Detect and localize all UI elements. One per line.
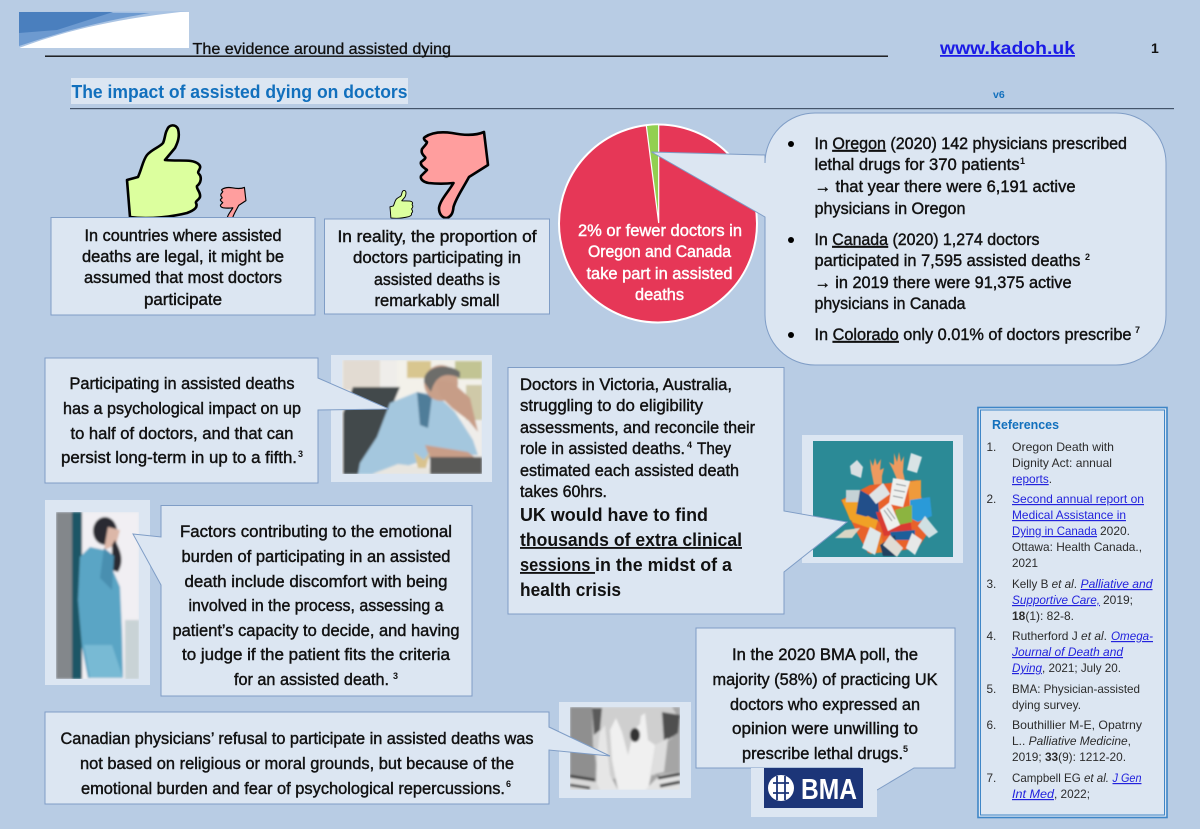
reference 4: Rutherford J et al. xyxy=(1012,629,1107,643)
reference 2 xyxy=(986,492,1144,570)
panel: BMA poll xyxy=(696,628,955,790)
reference 6: 2019; 33(9): 1212-20. xyxy=(1012,750,1126,764)
reference 2: 2020. xyxy=(1100,524,1130,538)
reference 7: J Gen xyxy=(1112,771,1142,785)
BMA logo xyxy=(751,768,877,817)
reference 5 xyxy=(986,682,1140,712)
panel: BMA poll: In the 2020 BMA poll, the xyxy=(732,646,918,664)
pie chart: 2% or fewer doctors in xyxy=(578,222,742,240)
bullet: Oregon: 1 xyxy=(1020,156,1025,166)
reference 1: 1. xyxy=(986,440,996,454)
bullet: Colorado: 7 xyxy=(1135,325,1140,335)
panel: psychological impact: has a psychological impact on up xyxy=(63,400,301,418)
header logo xyxy=(19,11,189,48)
panel: workload in Victoria: takes 60hrs. xyxy=(520,483,607,501)
bullet: Canada: → in 2019 there were 91,375 active xyxy=(814,274,1072,292)
panel: psychological impact: persist long-term in up to a fifth. xyxy=(61,449,297,467)
panel: Canadian physicians xyxy=(45,712,610,804)
panel: assumption xyxy=(51,218,315,315)
icon: small thumb down xyxy=(220,187,246,222)
panel: psychological impact: Participating in assisted deaths xyxy=(70,375,294,393)
header rule xyxy=(45,56,888,57)
panel: workload in Victoria: They xyxy=(697,440,732,458)
reference 2: 2021 xyxy=(1012,556,1038,570)
reference 2: Medical Assistance in xyxy=(1012,508,1126,522)
bullet: Canada xyxy=(788,231,1090,313)
reference 1: Oregon Death with xyxy=(1012,440,1114,454)
BMA logo: BMA xyxy=(801,774,857,806)
reference 3: Palliative and xyxy=(1080,577,1153,591)
key message: sessions xyxy=(520,554,595,575)
reference 1: reports. xyxy=(1012,472,1052,486)
reference 3 xyxy=(986,577,1153,623)
panel: BMA poll: 5 xyxy=(903,744,908,754)
pie chart xyxy=(559,124,757,322)
panel: assumption: In countries where assisted xyxy=(84,227,282,245)
panel: Canadian physicians: emotional burden and fear of psychological repercussions. xyxy=(81,780,505,798)
bullet: Canada: In Canada (2020) 1,274 doctors xyxy=(814,231,1040,249)
subtitle heading: The impact of assisted dying on doctors xyxy=(72,81,408,102)
bullet: Colorado: In Colorado only 0.01% of doctors prescribe xyxy=(814,326,1132,344)
panel: Canadian physicians: not based on religious or moral grounds, but because of the xyxy=(80,755,514,773)
reference 3: Kelly B et al. xyxy=(1012,577,1077,591)
reference 1: Dignity Act: annual xyxy=(1012,456,1112,470)
reference 2: 2. xyxy=(986,492,996,506)
panel: emotional burden: burden of participating in an assisted xyxy=(182,548,450,566)
bullet: Canada: 2 xyxy=(1085,252,1090,262)
panel: emotional burden: 3 xyxy=(393,671,398,681)
photo: distressed nurse xyxy=(45,500,150,685)
key message: in the midst of a xyxy=(595,554,733,575)
version label: v6 xyxy=(993,89,1005,101)
reference 7: Campbell EG et al. xyxy=(1012,771,1109,785)
header title: The evidence around assisted dying xyxy=(192,41,451,58)
pie chart: deaths xyxy=(635,286,684,304)
panel: assumption: assumed that most doctors xyxy=(84,269,282,287)
bullet: Canada: participated in 7,595 assisted deaths xyxy=(814,252,1080,270)
panel: reality xyxy=(324,219,550,314)
panel: references xyxy=(978,408,1167,818)
panel: statistics callout xyxy=(652,113,1166,365)
reference 6: Bouthillier M-E, Opatrny xyxy=(1012,718,1142,732)
panel: reality: In reality, the proportion of xyxy=(338,228,537,246)
reference 3: 2019; xyxy=(1103,593,1133,607)
reference 5: dying survey. xyxy=(1012,698,1081,712)
reference 2: Second annual report on xyxy=(1012,492,1144,506)
reference 4: , 2021; July 20. xyxy=(1042,661,1121,675)
reference 7: 7. xyxy=(986,771,996,785)
reference 4: Journal of Death and xyxy=(1011,645,1123,659)
references heading: References xyxy=(992,418,1059,432)
subtitle rule xyxy=(70,108,1174,109)
reference 4: Dying xyxy=(1012,661,1042,675)
panel: reality: doctors participating in xyxy=(353,249,521,267)
bullet: Oregon: lethal drugs for 370 patients xyxy=(814,156,1020,174)
panel: BMA poll: doctors who expressed an xyxy=(730,696,920,714)
panel: emotional burden: Factors contributing to the emotional xyxy=(180,523,452,541)
panel: workload in Victoria: struggling to do eligibility xyxy=(520,397,704,415)
reference 1 xyxy=(986,440,1114,486)
panel: emotional burden: death include discomfort with being xyxy=(184,573,448,591)
key message: UK would have to find xyxy=(520,504,708,525)
reference 7: , 2022; xyxy=(1054,787,1090,801)
reference 5: 5. xyxy=(986,682,996,696)
bullet: Canada: physicians in Canada xyxy=(814,295,966,313)
reference 3: Supportive Care, xyxy=(1012,593,1100,607)
panel: assumption: deaths are legal, it might be xyxy=(82,248,284,266)
panel: emotional burden: involved in the process, assessing a xyxy=(188,597,444,615)
reference 2: Dying in Canada xyxy=(1012,524,1097,538)
photo: paperwork illustration xyxy=(802,435,963,563)
panel: reality: assisted deaths is xyxy=(374,271,500,289)
panel: BMA poll: majority (58%) of practicing UK xyxy=(712,671,938,689)
panel: psychological impact: to half of doctors, and that can xyxy=(70,425,294,443)
reference 3: 18(1): 82-8. xyxy=(1012,609,1074,623)
bullet: Oregon: → that year there were 6,191 active xyxy=(814,178,1076,196)
panel: Canadian physicians: 6 xyxy=(506,779,511,789)
panel: emotional burden: for an assisted death. xyxy=(234,671,389,689)
panel: assumption: participate xyxy=(144,291,222,309)
panel: emotional burden: to judge if the patient fits the criteria xyxy=(182,646,450,664)
icon: small thumb up xyxy=(390,190,413,218)
bullet: Oregon: In Oregon (2020) 142 physicians prescribed xyxy=(814,135,1127,153)
reference 4: 4. xyxy=(986,629,996,643)
bullet: Oregon: physicians in Oregon xyxy=(814,200,966,218)
icon: big thumb down xyxy=(421,132,488,218)
reference 3: 3. xyxy=(986,577,996,591)
panel: workload in Victoria: Doctors in Victoria, Australia, xyxy=(520,376,732,394)
reference 4 xyxy=(986,629,1153,675)
reference 6: L.. Palliative Medicine, xyxy=(1012,734,1131,748)
panel: BMA poll: prescribe lethal drugs. xyxy=(742,745,903,763)
website link: www.kadoh.uk xyxy=(939,38,1075,58)
pie chart: Oregon and Canada xyxy=(588,243,731,261)
reference 2: Ottawa: Health Canada., xyxy=(1012,540,1142,554)
panel: psychological impact: 3 xyxy=(298,449,303,459)
reference 5: BMA: Physician-assisted xyxy=(1012,682,1140,696)
page number: 1 xyxy=(1151,40,1159,56)
reference 7 xyxy=(986,771,1142,801)
panel: workload in Victoria xyxy=(508,368,847,614)
panel: workload in Victoria: estimated each assisted death xyxy=(520,462,739,480)
panel: emotional burden: patient’s capacity to decide, and having xyxy=(172,622,460,640)
reference 4: Omega- xyxy=(1111,629,1153,643)
reference 6: 6. xyxy=(986,718,996,732)
photo: face covered by hands xyxy=(559,702,691,798)
panel: BMA poll: opinion were unwilling to xyxy=(732,720,918,738)
panel: workload in Victoria: assessments, and reconcile their xyxy=(520,419,756,437)
panel: workload in Victoria: role in assisted deaths. xyxy=(520,440,685,458)
photo: exhausted doctor at desk xyxy=(331,355,492,482)
reference 6 xyxy=(986,718,1142,764)
reference 7: Int Med xyxy=(1012,787,1054,801)
panel: psychological impact xyxy=(45,358,389,483)
panel: workload in Victoria: 4 xyxy=(687,440,692,450)
key message xyxy=(520,504,742,600)
key message: health crisis xyxy=(520,579,621,600)
icon: big thumb up xyxy=(127,125,201,218)
panel: Canadian physicians: Canadian physicians’ refusal to participate in assisted deaths was xyxy=(60,730,534,748)
panel: emotional burden xyxy=(133,506,472,696)
key message: thousands of extra clinical xyxy=(520,529,742,550)
bullet: Oregon xyxy=(788,135,1127,218)
pie chart: take part in assisted xyxy=(586,265,732,283)
panel: reality: remarkably small xyxy=(374,292,500,310)
